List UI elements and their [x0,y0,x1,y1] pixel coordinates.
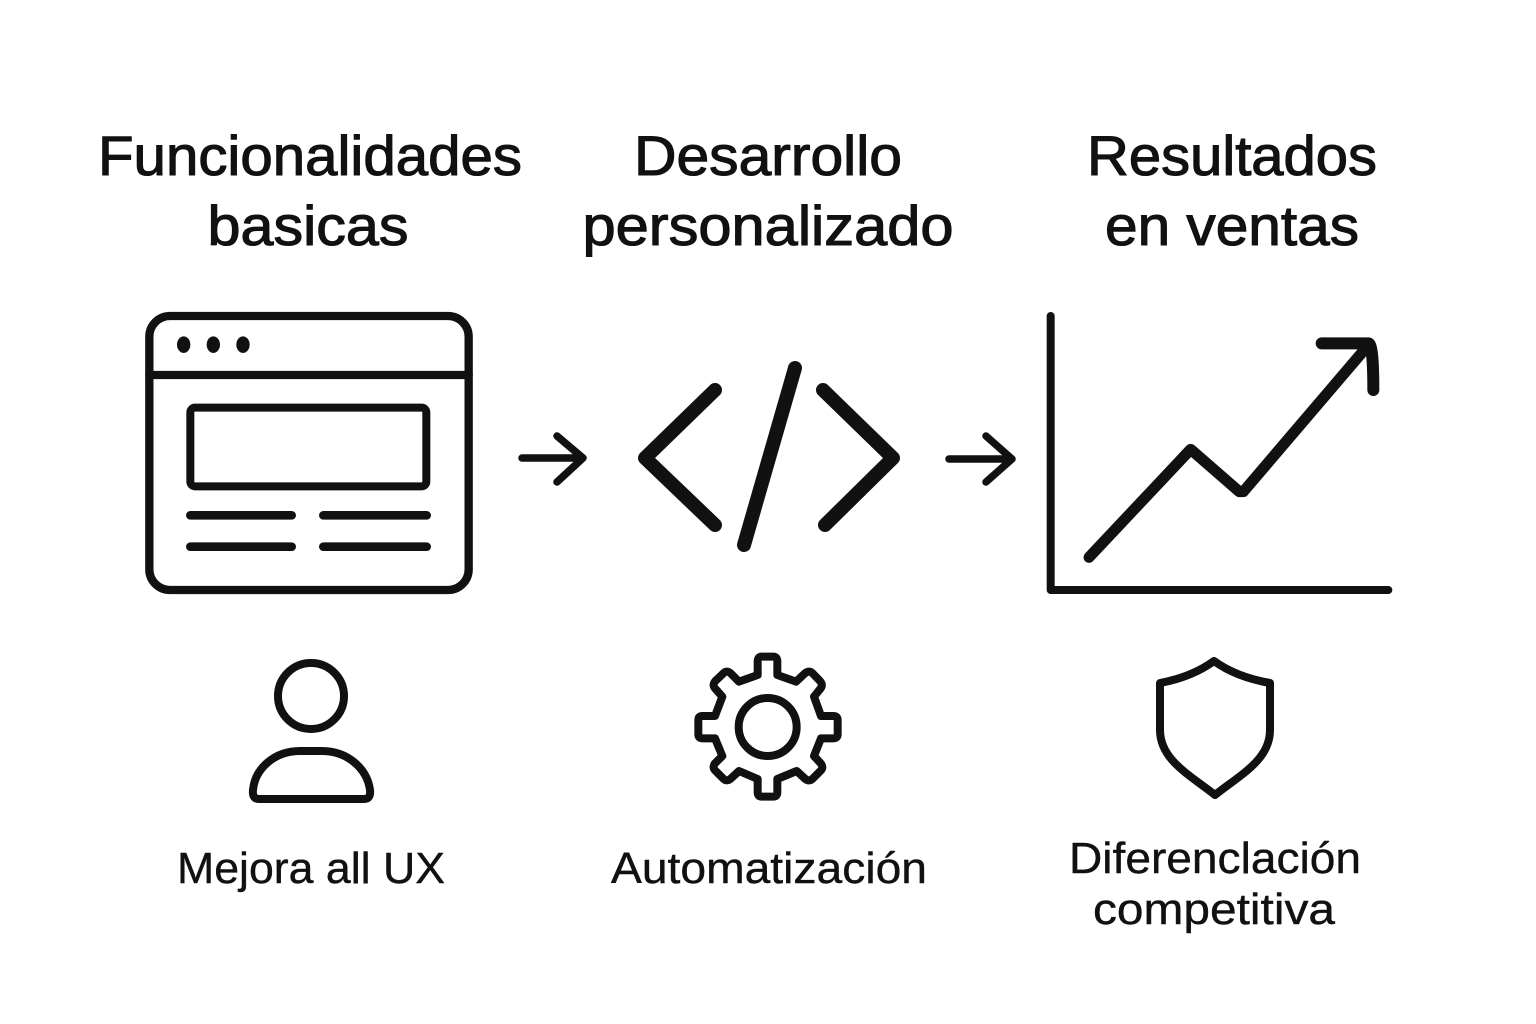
label: Diferenclación competitiva: Diferenclación [1069,834,1361,883]
icon: shield [1160,661,1270,795]
heading: Resultados en ventas [1087,124,1377,257]
label: Diferenclación competitiva [1069,834,1361,934]
icon: rising line chart [1051,316,1388,590]
heading: Funcionalidades basicas: Funcionalidades [98,124,522,187]
arrow: browser to code [522,436,583,482]
label: Automatización: Automatización [611,844,927,893]
icon: code brackets [645,368,893,545]
icon: gear [698,657,838,797]
arrow: code to chart [949,436,1012,482]
heading: Resultados en ventas: Resultados [1087,124,1377,187]
heading: Funcionalidades basicas [98,124,522,257]
heading: Desarrollo personalizado: personalizado [582,194,954,257]
icon: user [253,663,370,799]
heading: Desarrollo personalizado [582,124,954,257]
icon: browser window [149,316,469,590]
label: Diferenclación competitiva: competitiva [1093,885,1336,934]
label: Mejora all UX: Mejora all UX [177,844,445,893]
heading: Funcionalidades basicas: basicas [208,194,408,257]
heading: Resultados en ventas: en ventas [1105,194,1359,257]
heading: Desarrollo personalizado: Desarrollo [634,124,902,187]
